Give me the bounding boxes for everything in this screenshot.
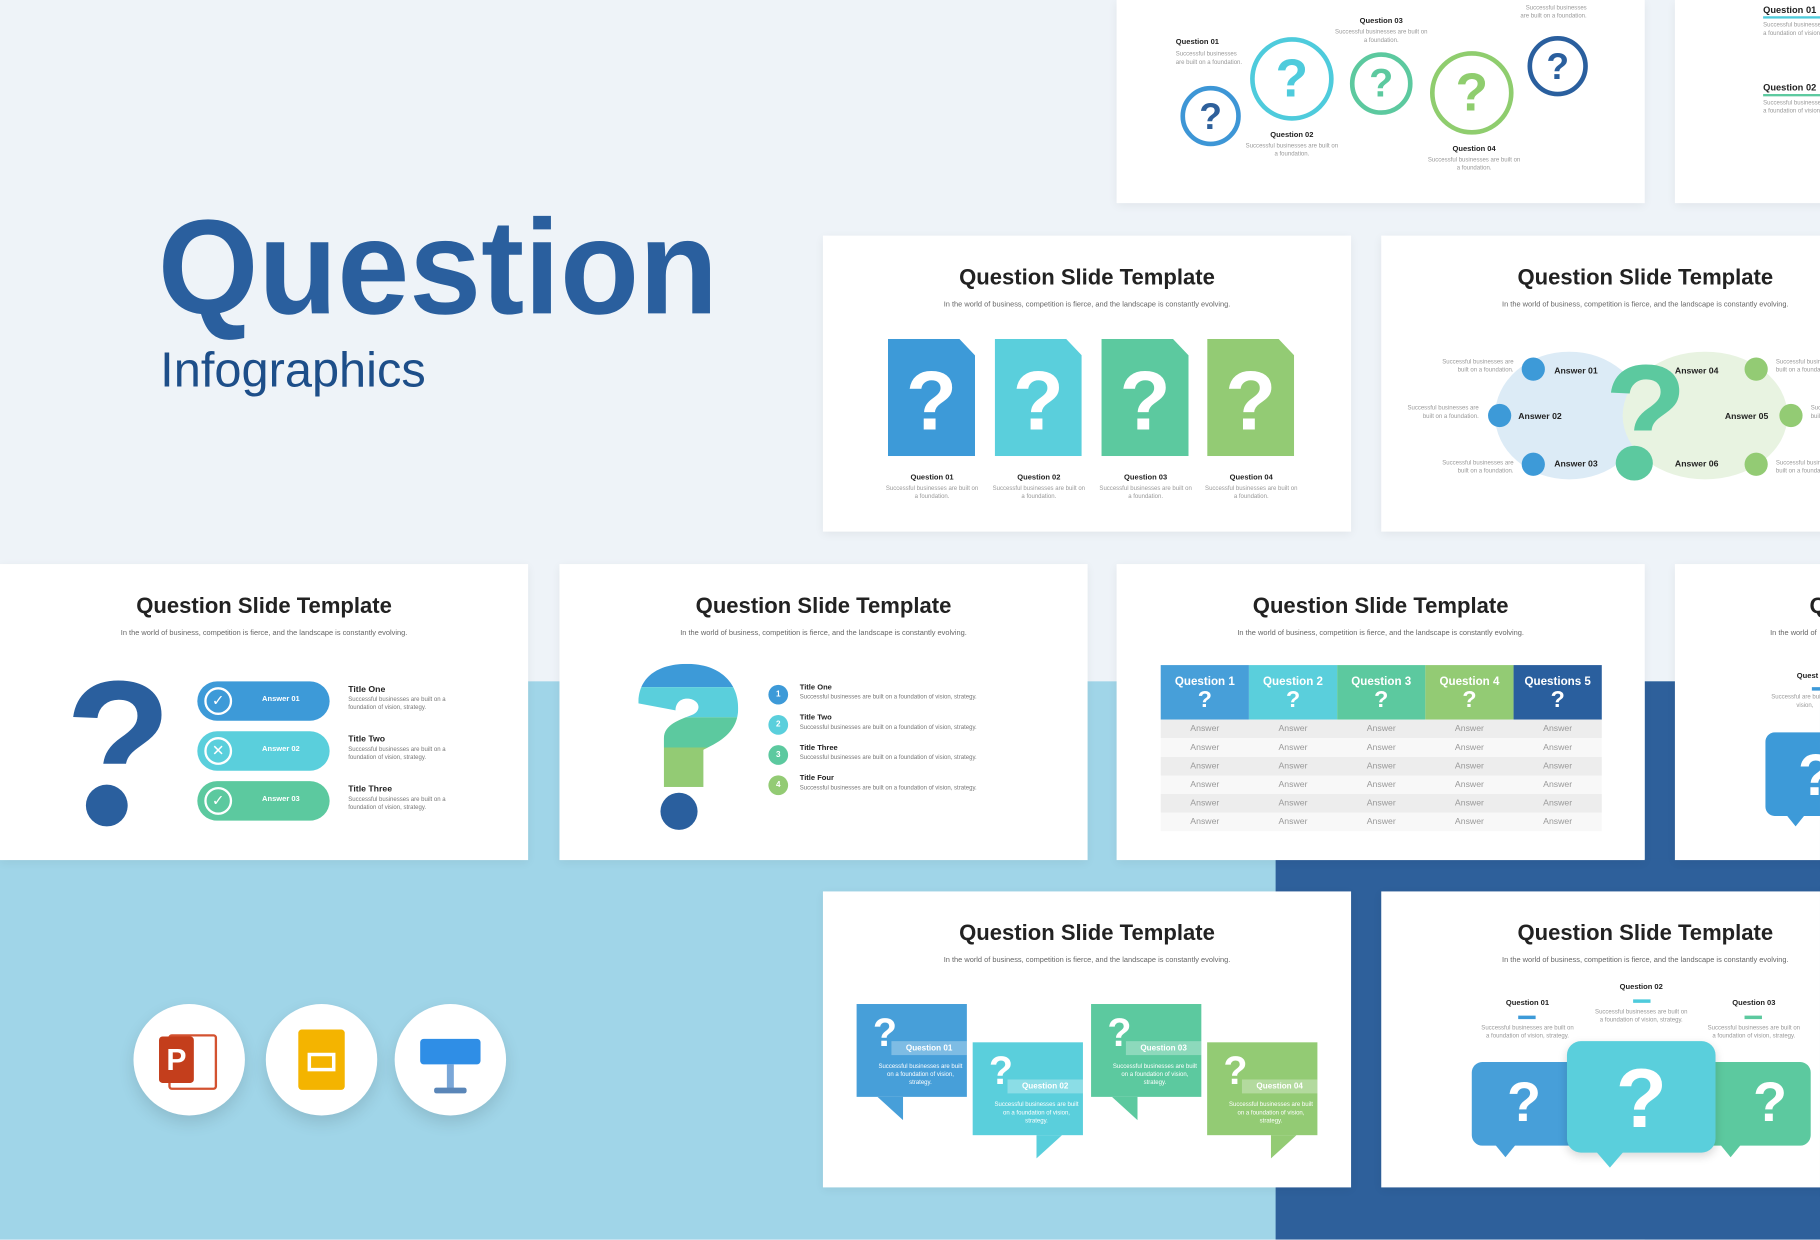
slide: table: ? — [1551, 687, 1565, 713]
slide: rounded bubbles: Question 02 — [1620, 983, 1663, 991]
slide: table: ? — [1374, 687, 1388, 713]
slide: numbered list: Title Four — [800, 774, 834, 782]
slide: table: Answer — [1367, 742, 1396, 752]
slide: documents: Successful businesses are built on a foundation. — [1099, 485, 1192, 500]
slide: circles top: Successful businesses are built on a foundation. — [1246, 143, 1338, 158]
slide: documents: Question 04 — [1230, 474, 1273, 482]
slide: table: Answer — [1190, 742, 1219, 752]
slide: pills answers: Answer 03 — [262, 795, 300, 803]
slide: documents: Successful businesses are built on a foundation. — [1205, 485, 1297, 500]
slide: numbered list: In the world of business, competition is fierce, and the landscape is constantly evolving. — [680, 629, 967, 637]
slide: table: Answer — [1455, 797, 1484, 808]
slide: table: Answer — [1367, 779, 1396, 789]
slide: speech bubbles: Successful businesses are built on a foundation of vision, strategy. — [1229, 1102, 1313, 1124]
slide: venn answers: Successful businesses are built on a foundation. — [1442, 359, 1514, 373]
slide: rounded bubbles: Successful businesses are built on a foundation of vision, strategy. — [1481, 1025, 1574, 1040]
slide: table: Answer — [1367, 723, 1396, 734]
slide: documents: Successful businesses are built on a foundation. — [993, 485, 1085, 500]
slide: venn answers: Answer 03 — [1554, 458, 1598, 469]
slide: partial right: Quest — [1797, 672, 1818, 680]
slide: speech bubbles: Question 01 — [906, 1045, 952, 1053]
slide: table: Answer — [1279, 742, 1308, 752]
slide: documents: In the world of business, competition is fierce, and the landscape is constantly evolving. — [944, 301, 1230, 309]
slide: documents: ? — [1120, 355, 1171, 448]
slide: speech bubbles: Question 04 — [1256, 1083, 1303, 1091]
slide: pills answers: Answer 02 — [262, 745, 300, 753]
slide: circles top: Successful businesses are built on a foundation. — [1176, 51, 1242, 66]
slide: pills answers: Successful businesses are built on a foundation of vision, strategy. — [348, 796, 446, 811]
slide: rounded bubbles: In the world of business, competition is fierce, and the landscape is constantly evolving. — [1502, 956, 1789, 965]
slide: documents: Successful businesses are built on a foundation. — [886, 485, 978, 500]
slide: numbered list: Successful businesses are built on a foundation of vision, strategy. — [800, 785, 977, 792]
slide: table: Answer — [1279, 797, 1308, 808]
slide: speech bubbles: Successful businesses are built on a foundation of vision, strategy. — [878, 1063, 962, 1086]
slide: top right partial: Question 02 — [1763, 82, 1816, 93]
slide: table: Answer — [1190, 816, 1219, 826]
slide: table: ? — [1286, 687, 1300, 713]
slide: table: Answer — [1455, 779, 1484, 789]
slide: top right partial: Question 01 — [1763, 5, 1816, 15]
slide: venn answers: Answer 05 — [1725, 411, 1768, 421]
slide: circles top: Question 02 — [1270, 131, 1313, 139]
slide: speech bubbles: In the world of business, competition is fierce, and the landscape is constantly evolving. — [944, 956, 1230, 965]
slide: documents: ? — [1013, 355, 1064, 448]
slide: circles top: Question 01 — [1176, 38, 1219, 46]
slide: documents: ? — [906, 355, 957, 448]
slide: table: ? — [1198, 687, 1212, 713]
slide: table: Answer — [1543, 797, 1572, 808]
slide: numbered list: 4 — [776, 781, 781, 789]
slide: circles top: Successful businesses are built on a foundation. — [1428, 157, 1520, 171]
slide: table: Answer — [1190, 723, 1219, 734]
slide: table: Answer — [1543, 816, 1572, 826]
slide: venn answers: Answer 06 — [1675, 458, 1718, 469]
slide: table: Answer — [1543, 723, 1572, 734]
slide: table: Answer — [1190, 760, 1219, 771]
slide: documents: Question 01 — [910, 474, 954, 482]
slide: numbered list: 1 — [776, 691, 781, 699]
slide: table: Question Slide Template — [1253, 594, 1509, 619]
slide: table: ? — [1462, 687, 1477, 713]
slide: numbered list: 2 — [776, 721, 781, 729]
slide: table: Answer — [1367, 816, 1396, 826]
slide: numbered list: Title One — [800, 684, 832, 692]
slide: speech bubbles: Question 03 — [1140, 1045, 1187, 1053]
slide: pills answers: Title Three — [348, 783, 392, 794]
slide: table: Answer — [1367, 760, 1396, 771]
slide: numbered list: Title Two — [800, 714, 832, 722]
slide: circles top: ? — [1369, 62, 1393, 106]
slide: table: Question 4 — [1439, 676, 1499, 688]
slide: numbered list: Successful businesses are built on a foundation of vision, strategy. — [800, 724, 977, 731]
slide: circles top: Successful businesses are built on a foundation. — [1335, 29, 1427, 44]
slide: table: Answer — [1543, 760, 1572, 771]
slide: rounded bubbles — [1381, 891, 1820, 1187]
slide: rounded bubbles: Question 01 — [1506, 999, 1549, 1007]
slide: venn answers: Answer 04 — [1675, 366, 1718, 376]
icon: powerpoint: P — [166, 1042, 186, 1077]
slide: table: Questions 5 — [1524, 676, 1591, 688]
slide: pills answers: Title Two — [348, 734, 385, 744]
slide: speech bubbles: ? — [1223, 1049, 1248, 1093]
slide: circles top: ? — [1276, 48, 1308, 108]
slide: speech bubbles: Successful businesses are built on a foundation of vision, strategy. — [1113, 1063, 1197, 1086]
slide: table — [1117, 564, 1645, 860]
slide: partial right: In the world of — [1770, 629, 1817, 637]
slide: table: Answer — [1190, 797, 1219, 808]
slide: rounded bubbles: Successful businesses are built on a foundation of vision, strategy. — [1595, 1009, 1687, 1023]
slide: numbered list: 3 — [776, 751, 781, 759]
slide: circles top: Successful businesses are built on a foundation. — [1520, 5, 1587, 19]
icon: google slides — [266, 1004, 377, 1115]
slide: table: Answer — [1455, 742, 1484, 752]
slide: documents: Question 03 — [1124, 474, 1167, 482]
slide: venn answers: Successful businesses are built on a foundation. — [1407, 405, 1479, 420]
slide: table: Answer — [1455, 760, 1484, 771]
slide: rounded bubbles: ? — [1507, 1072, 1541, 1134]
slide: circles top: ? — [1455, 62, 1488, 122]
slide: rounded bubbles: Question Slide Template — [1517, 922, 1773, 946]
icon: powerpoint — [133, 1004, 245, 1115]
slide: venn answers: In the world of business, competition is fierce, and the landscape is constantly evolving. — [1502, 301, 1789, 309]
slide: table: Answer — [1279, 779, 1308, 789]
slide: speech bubbles: Successful businesses are built on a foundation of vision, strategy. — [995, 1102, 1079, 1124]
slide: circles top: Question 03 — [1360, 17, 1403, 26]
slide: pills answers: ✓ — [212, 692, 225, 709]
slide: rounded bubbles: Question 03 — [1732, 999, 1775, 1007]
slide: pills answers: Successful businesses are built on a foundation of vision, strategy. — [348, 696, 446, 711]
slide: pills answers: In the world of business, competition is fierce, and the landscape is constantly evolving. — [121, 629, 407, 637]
slide: numbered list: Question Slide Template — [696, 594, 951, 619]
slide: table: Answer — [1543, 742, 1572, 752]
slide: table: Answer — [1543, 779, 1572, 789]
slide: venn answers: Question Slide Template — [1517, 266, 1773, 290]
slide: rounded bubbles: ? — [1753, 1072, 1787, 1134]
slide: documents: Question Slide Template — [959, 266, 1215, 290]
slide: venn answers: Answer 02 — [1518, 411, 1562, 421]
slide: speech bubbles: Question Slide Template — [959, 922, 1215, 946]
slide: venn answers: Answer 01 — [1554, 366, 1598, 376]
slide: circles top: ? — [1199, 95, 1222, 137]
slide: venn answers: Successful businesses are built on a foundation. — [1442, 460, 1514, 474]
slide: table: Question 3 — [1351, 676, 1411, 688]
slide: speech bubbles — [823, 891, 1351, 1187]
slide: venn answers — [1381, 236, 1820, 532]
slide: speech bubbles: ? — [989, 1049, 1013, 1093]
slide: documents: Question 02 — [1017, 474, 1060, 482]
slide: table: Answer — [1190, 779, 1219, 789]
background: light blue lower — [0, 681, 1820, 1240]
slide: table: In the world of business, competition is fierce, and the landscape is constantly evolving. — [1237, 629, 1524, 637]
slide: table: Answer — [1279, 816, 1308, 826]
subtitle: Infographics — [160, 342, 426, 397]
slide: table: Question 2 — [1263, 676, 1323, 688]
slide: rounded bubbles: Successful businesses are built on a foundation of vision, strategy. — [1708, 1025, 1800, 1040]
slide: circles top: Question 04 — [1453, 145, 1496, 153]
slide: pills answers: ✓ — [212, 792, 225, 809]
slide: top right partial — [1675, 0, 1820, 203]
background: dark blue right — [1645, 681, 1820, 1240]
slide: speech bubbles: ? — [1107, 1011, 1131, 1055]
slide: table: Answer — [1455, 723, 1484, 734]
slide: table: Answer — [1367, 797, 1396, 808]
slide: table: Answer — [1455, 816, 1484, 826]
slide: rounded bubbles: ? — [1616, 1053, 1667, 1146]
slide: circles top: ? — [1546, 45, 1569, 87]
slide: documents — [823, 236, 1351, 532]
slide: speech bubbles: Question 02 — [1022, 1083, 1068, 1091]
slide: table: Answer — [1279, 723, 1308, 734]
slide: numbered list: Successful businesses are built on a foundation of vision, strategy. — [800, 694, 977, 701]
icon: keynote — [395, 1004, 506, 1115]
slide: pills answers: Successful businesses are built on a foundation of vision, strategy. — [348, 746, 446, 761]
slide: pills answers: Answer 01 — [262, 695, 300, 703]
slide: numbered list: Successful businesses are built on a foundation of vision, strategy. — [800, 754, 977, 761]
slide: numbered list: Title Three — [800, 744, 838, 752]
slide: pills answers: Title One — [348, 684, 385, 694]
slide: pills answers: ✕ — [212, 742, 225, 759]
slide: pills answers: Question Slide Template — [136, 594, 392, 619]
title: Question — [158, 192, 718, 342]
slide: partial right — [1675, 564, 1820, 860]
slide: pills answers — [0, 564, 528, 860]
slide: table: Answer — [1279, 760, 1308, 771]
slide: speech bubbles: ? — [873, 1011, 897, 1055]
slide: table: Question 1 — [1175, 676, 1235, 688]
slide: documents: ? — [1225, 355, 1276, 448]
slide: numbered list — [559, 564, 1088, 860]
slide: circles top — [1117, 0, 1645, 203]
